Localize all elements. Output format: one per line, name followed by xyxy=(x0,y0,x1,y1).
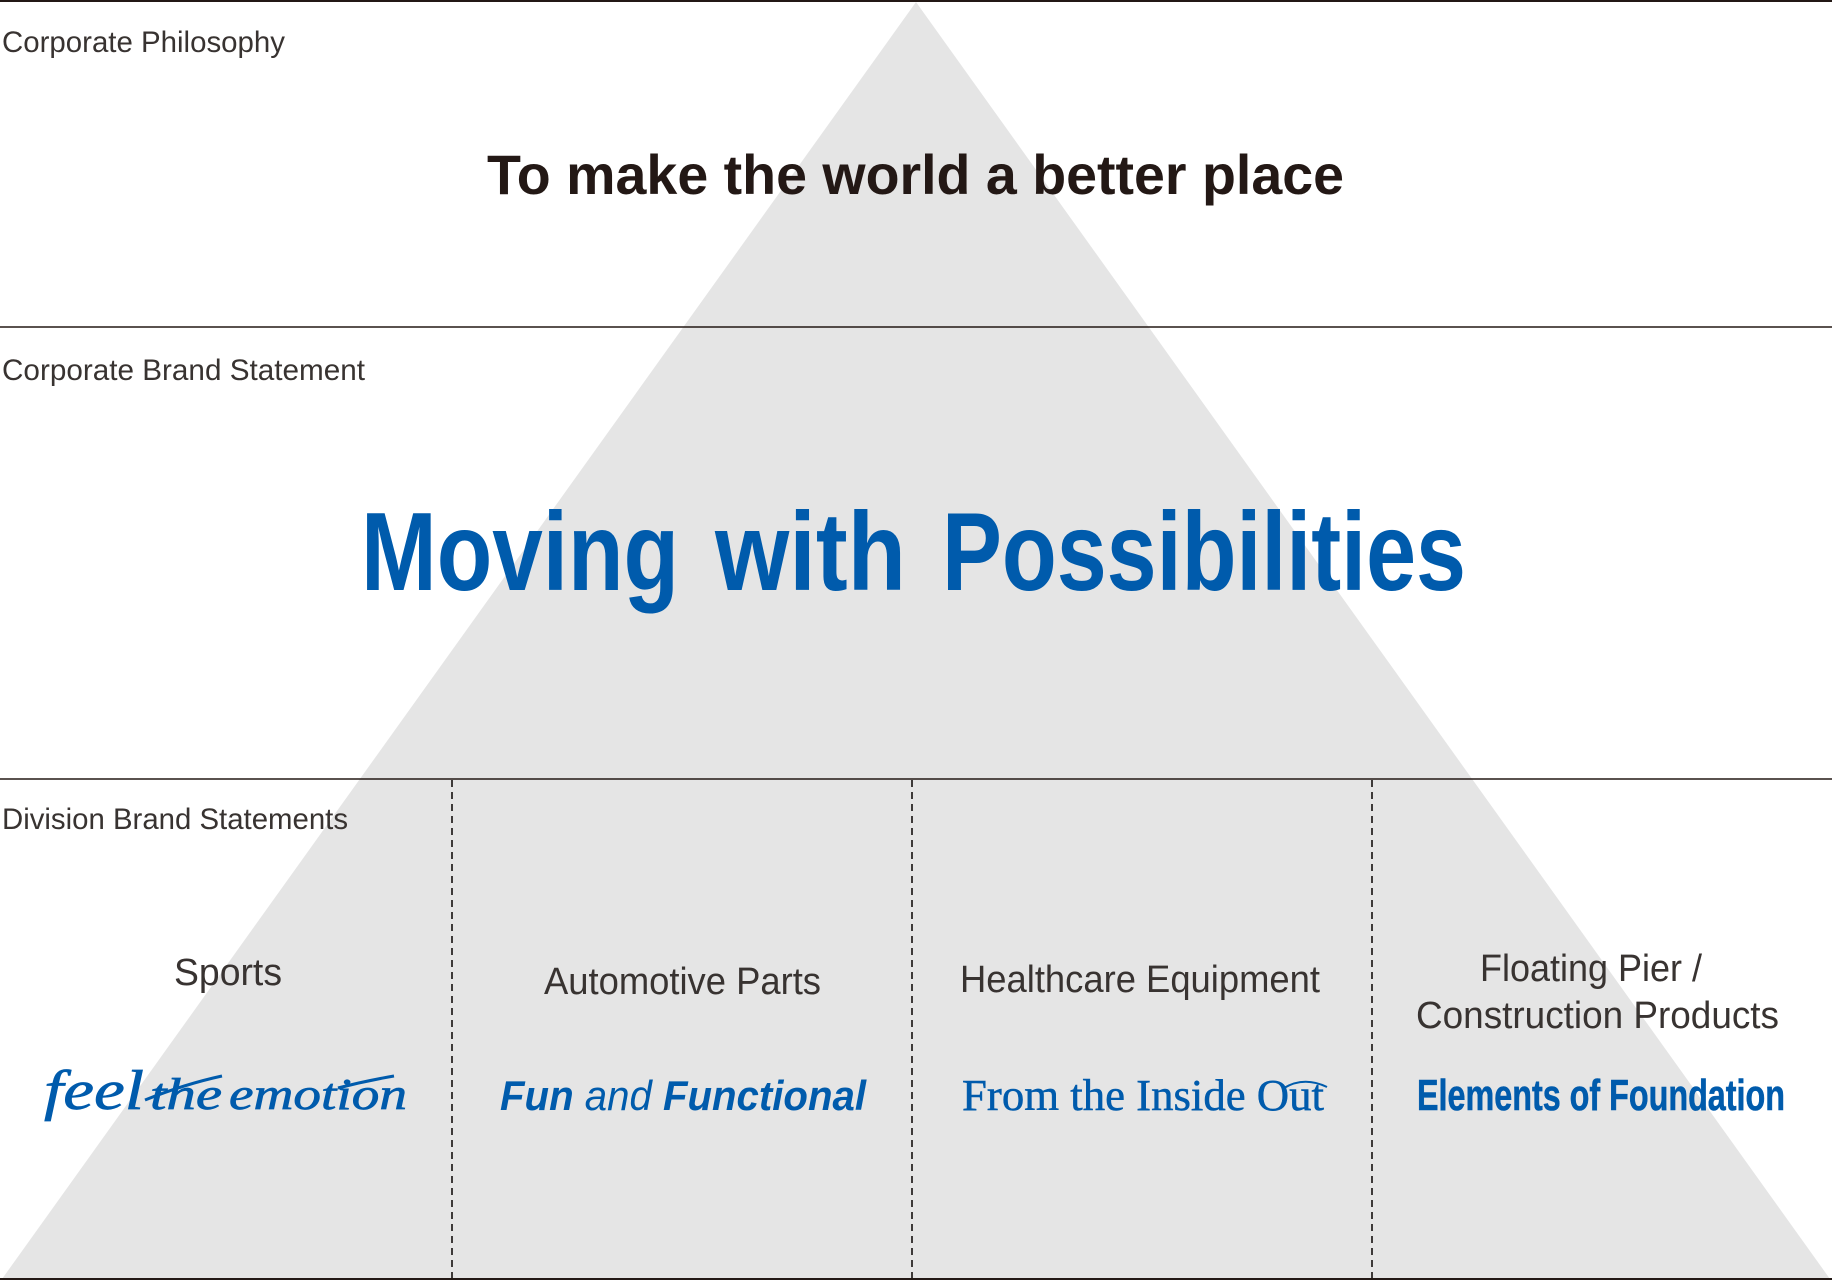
heading: brand statement xyxy=(361,490,1466,614)
division column separators xyxy=(452,780,1372,1278)
statement: feel the emotion: emotion xyxy=(229,1070,407,1119)
division name: Construction Products: Construction Products xyxy=(1416,995,1779,1037)
division: Healthcare Equipment xyxy=(960,959,1327,1120)
label: Division Brand Statements: Division Brand Statements xyxy=(2,803,348,836)
statement: Fun and Functional: Fun and Functional xyxy=(500,1072,867,1119)
statement: feel the emotion: feel xyxy=(44,1060,144,1122)
heading: brand statement: Moving xyxy=(361,490,679,614)
heading: brand statement: Possibilities xyxy=(942,490,1466,614)
division: Floating Pier / Construction Products xyxy=(1416,948,1785,1120)
heading: brand statement: with xyxy=(714,490,906,614)
statement: feel the emotion: the xyxy=(150,1070,222,1119)
division name: Sports: Sports xyxy=(174,952,282,994)
division name: Automotive Parts: Automotive Parts xyxy=(544,961,821,1003)
division: Automotive Parts xyxy=(500,961,867,1119)
heading: philosophy statement: To make the world a better place xyxy=(487,143,1344,206)
division name: Floating Pier: Floating Pier / xyxy=(1480,948,1702,990)
division name: Healthcare Equipment: Healthcare Equipment xyxy=(960,959,1320,1001)
label: Corporate Philosophy: Corporate Philosophy xyxy=(2,26,285,59)
statement: feel the emotion xyxy=(44,1060,407,1122)
label: Corporate Brand Statement: Corporate Brand Statement xyxy=(2,354,366,387)
division: Sports xyxy=(44,952,407,1122)
statement: From the Inside Out: From the Inside Out xyxy=(962,1071,1324,1120)
